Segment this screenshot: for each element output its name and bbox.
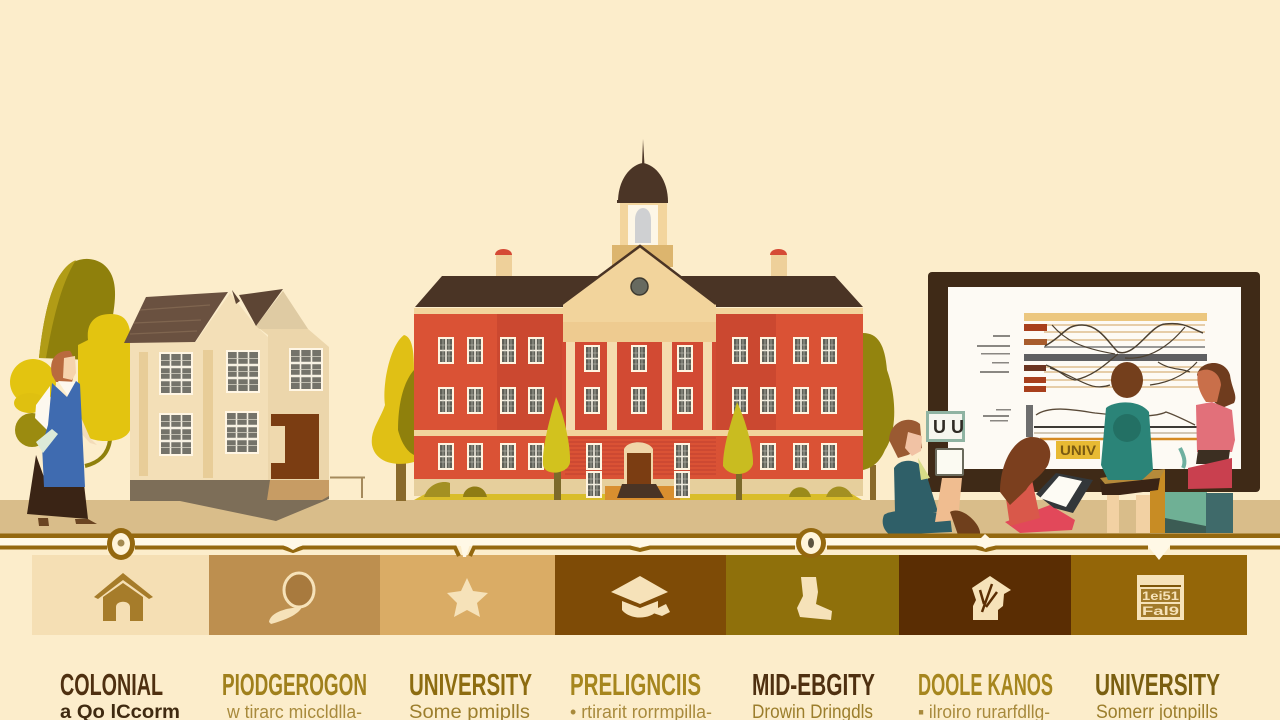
tall entrance windows (586, 443, 602, 470)
cupola tower (620, 203, 667, 247)
belt (1196, 450, 1230, 464)
label: university final: UNIVERSITY (1095, 667, 1220, 702)
stool legs (1107, 492, 1119, 533)
icon: magnifier with hand (269, 573, 314, 624)
seat (1100, 478, 1160, 495)
face (63, 356, 76, 380)
arm (935, 478, 962, 522)
era panels (32, 555, 1247, 635)
panel 3 (380, 555, 555, 635)
panel 1 (32, 555, 209, 635)
front door (624, 442, 653, 484)
white sleeve and collar (35, 386, 53, 430)
brick ground floor (565, 438, 716, 474)
left side tree of main hall (372, 335, 414, 501)
bushes (424, 482, 450, 497)
panel 7 (1071, 555, 1247, 635)
right side tree of main hall (863, 333, 894, 500)
icon: calendar: 1ei51 (1142, 589, 1179, 603)
chimneys (496, 255, 512, 290)
panel 5 (726, 555, 899, 635)
icon: calendar (1137, 575, 1184, 620)
house windows (159, 352, 193, 395)
standing teacher (1180, 363, 1235, 489)
label: progression: PIODGEROGON (222, 667, 367, 702)
house foundation (130, 480, 329, 521)
label: university: UNIVERSITY (409, 667, 532, 702)
screen frame (928, 272, 1260, 492)
collar (918, 458, 930, 480)
conical tree right (723, 402, 753, 500)
lower chart (1026, 405, 1033, 437)
label: colonial (60, 667, 180, 720)
girl tablet (1036, 473, 1093, 513)
hall windows upper row (438, 337, 454, 364)
label: university final (1095, 667, 1220, 720)
ground strip (0, 500, 1280, 534)
house door (271, 414, 319, 479)
lower rail (0, 548, 1280, 556)
house main gable (195, 293, 268, 343)
blue apron (42, 381, 85, 487)
screen surface (948, 287, 1241, 469)
main university hall (414, 139, 863, 500)
red walls (414, 308, 863, 479)
node 2 (286, 542, 300, 550)
shoes (38, 518, 49, 526)
cupola spire (642, 139, 644, 165)
label: university (409, 667, 532, 720)
label: colonial: COLONIAL (60, 667, 163, 702)
house pilasters (139, 352, 148, 476)
house left roof (124, 292, 228, 343)
front steps (617, 484, 664, 498)
panel 2 (209, 555, 380, 635)
student on stool (1100, 362, 1165, 533)
torso (894, 461, 938, 512)
house right roof (239, 289, 283, 326)
pink bag (1188, 458, 1232, 489)
node 6 (977, 534, 994, 549)
pediment clock (631, 278, 648, 295)
icon: star (447, 578, 488, 617)
side labels on screen (977, 335, 1011, 422)
roof (415, 276, 863, 307)
label: progression (222, 667, 367, 720)
plinth (414, 479, 863, 496)
label: doole kanos: DOOLE KANOS (918, 667, 1053, 702)
tablet (935, 448, 964, 476)
node 4 (634, 540, 646, 548)
colonial woman figure (27, 351, 97, 526)
seated girl with tablet (1000, 437, 1093, 533)
girl shirt (1003, 470, 1040, 526)
node 3 (460, 541, 471, 557)
node 1 (107, 528, 135, 560)
skirt (27, 455, 88, 519)
cupola base (612, 245, 673, 267)
label: preliminaries (570, 667, 712, 720)
head (889, 420, 922, 458)
label: mid-century (752, 667, 875, 720)
hair (51, 351, 74, 382)
hair (1197, 363, 1235, 408)
fence (330, 477, 365, 498)
face (1197, 370, 1221, 402)
colonial house (124, 289, 365, 521)
node 7 (1148, 546, 1170, 560)
timeline chart on screen: UNIV (1060, 442, 1097, 458)
classroom display screen (928, 272, 1260, 492)
legs (883, 510, 952, 535)
timeline chart on screen (1024, 313, 1207, 459)
trees beside colonial house (10, 259, 131, 466)
house main wall (130, 342, 269, 480)
girl skirt (1005, 505, 1075, 533)
icon: abstract emblem (972, 576, 1011, 620)
house right wing (256, 291, 329, 480)
girl hair (1000, 437, 1050, 505)
pediment (563, 248, 716, 342)
label: mid-century: MID-EBGITY (752, 667, 875, 702)
columns (566, 342, 575, 432)
held book (36, 429, 58, 453)
lawn (414, 494, 862, 500)
house steps (267, 480, 329, 500)
hall windows middle row (438, 387, 454, 414)
conical tree left (543, 397, 570, 500)
shirt (1196, 402, 1235, 452)
foot (950, 511, 980, 535)
node 5 (796, 528, 826, 558)
light strip (0, 538, 1280, 546)
student seated left with devices (883, 411, 980, 535)
hand held display: U U (933, 417, 964, 437)
floor band (414, 430, 863, 436)
cornice (414, 308, 863, 314)
dome (618, 163, 668, 202)
panel 4 (555, 555, 726, 635)
timeline rail (0, 528, 1280, 560)
upper rail (0, 534, 1280, 538)
teal body (1101, 402, 1153, 480)
head (1111, 362, 1143, 398)
icon: calendar: Fal9 (1142, 604, 1179, 618)
label: preliminaries: PRELIGNCIIS (570, 667, 701, 702)
teal strap (1180, 448, 1184, 468)
icon: graduation cap (611, 576, 670, 618)
icon: boot figure (797, 577, 832, 620)
label: doole kanos (918, 667, 1053, 720)
teal cabinet and bin (1165, 492, 1233, 533)
orange bar (1040, 438, 1205, 440)
panel 6 (899, 555, 1071, 635)
hall windows ground row (438, 443, 454, 470)
icon: house (94, 573, 153, 621)
